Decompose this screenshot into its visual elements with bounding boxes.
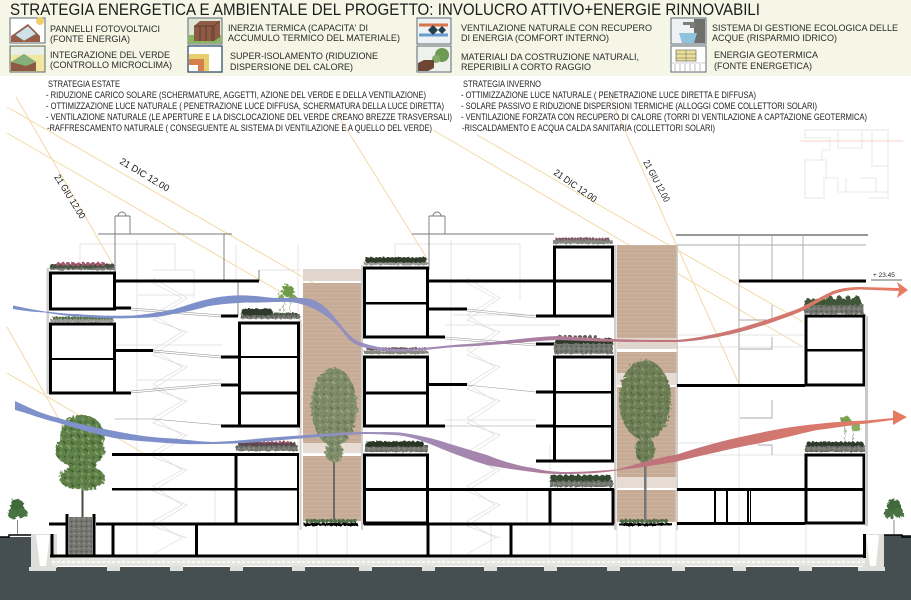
structure: roof lines and chimneys <box>98 212 868 455</box>
text block: strategia estate: - OTTIMIZZAZIONE LUCE NATURALE ( PENETRAZIONE LUCE DIFFUSA, SCHERMATURA DELLA LUCE DIRETTA) <box>46 100 444 111</box>
tree: right courtyard <box>619 360 671 522</box>
legend text: pannelli fotovoltaici <box>50 24 160 45</box>
green roofs <box>50 239 865 526</box>
section: right building structure <box>677 280 868 526</box>
icon: natural materials <box>417 46 451 72</box>
legend text: energia geotermica: (FONTE ENERGETICA) <box>714 61 812 72</box>
gray end walls <box>46 245 678 530</box>
text block: strategia inverno <box>461 78 867 133</box>
tree: small left <box>8 499 27 534</box>
icon: natural ventilation <box>417 18 451 44</box>
legend text: energia geotermica: ENERGIA GEOTERMICA <box>714 50 819 61</box>
text block: strategia estate: -RAFFRESCAMENTO NATURALE ( CONSEGUENTE AL SISTEMA DI VENTILAZIONE E A QUELLO DEL VERDE) <box>47 122 432 133</box>
legend text: inerzia termica <box>228 23 400 44</box>
stair towers <box>80 240 806 566</box>
key plan <box>800 130 903 198</box>
legend text: materiali naturali: REPERIBILI A CORTO RAGGIO <box>461 62 591 73</box>
courtyard planters <box>304 521 672 526</box>
roof garden 8 <box>554 337 613 354</box>
legend text: super isolamento: SUPER-ISOLAMENTO (RIDUZIONE <box>230 51 378 62</box>
small roof tree 1 <box>278 285 296 314</box>
planter with gravel <box>66 514 96 556</box>
section: left building structure <box>49 273 299 556</box>
text block: strategia estate: - RIDUZIONE CARICO SOLARE (SCHERMATURE, AGGETTI, AZIONE DEL VERDE E DELLA VENTILAZIONE) <box>46 89 426 100</box>
sun angle labels: 21 GIU 12.00 <box>640 158 672 204</box>
legend text: super isolamento <box>230 51 378 73</box>
legend text: ventilazione naturale: VENTILAZIONE NATURALE CON RECUPERO <box>461 23 652 34</box>
text block: strategia inverno: -RISCALDAMENTO E ACQUA CALDA SANITARIA (COLLETTORI SOLARI) <box>462 122 715 133</box>
legend text: gestione acque <box>712 23 898 44</box>
wind flow: lower ribbon <box>15 401 907 474</box>
legend text: super isolamento: DISPERSIONE DEL CALORE) <box>230 62 353 73</box>
text block: strategia estate: STRATEGIA ESTATE <box>48 78 120 89</box>
title: STRATEGIA ENERGETICA E AMBIENTALE DEL PROGETTO: INVOLUCRO ATTIVO+ENERGIE RINNOVABILI <box>10 1 760 19</box>
icon: super insulation <box>188 46 222 72</box>
section: central building structure <box>364 247 614 556</box>
sun angle labels: 21 GIU 12.00 <box>51 173 87 221</box>
roof garden 5 <box>364 260 428 265</box>
roof garden 9 <box>365 444 428 452</box>
text block: strategia inverno: - SOLARE PASSIVO E RIDUZIONE DISPERSIONI TERMICHE (ALLOGGI COME COLLETTORI SOLARI) <box>461 100 817 111</box>
roof garden 6 <box>364 349 428 354</box>
sun angle labels: 21 DIC 12.00 <box>117 156 171 194</box>
tree: small right <box>884 499 904 534</box>
roof garden 1 <box>50 264 115 270</box>
legend text: integrazione del verde: (CONTROLLO MICROCLIMA) <box>50 60 172 71</box>
legend text: materiali naturali: MATERIALI DA COSTRUZIONE NATURALI, <box>461 52 639 63</box>
roof garden 3 <box>241 312 300 319</box>
elevation mark <box>871 272 902 280</box>
panel: legend header <box>0 0 911 76</box>
wood facade panels <box>303 245 677 522</box>
legend text: gestione acque: SISTEMA DI GESTIONE ECOLOGICA DELLE <box>712 23 898 34</box>
text block: strategia estate <box>46 78 452 133</box>
legend text: ventilazione naturale: DI ENERGIA (COMFORT INTERNO) <box>461 33 609 44</box>
sun angle labels <box>51 156 672 221</box>
text block: strategia estate: - VENTILAZIONE NATURALE (LE APERTURE E LA DISCLOCAZIONE DEL VERDE CREANO BREZZE TRASVERSALI) <box>46 111 452 122</box>
legend text: inerzia termica: INERZIA TERMICA (CAPACITA' DI <box>228 23 368 34</box>
icon: green integration <box>10 46 45 72</box>
sun angle labels: 21 DIC 12.00 <box>551 167 599 205</box>
legend text: integrazione del verde: INTEGRAZIONE DEL VERDE <box>50 50 170 61</box>
icon: geothermal <box>671 46 706 72</box>
icon: water management <box>671 18 706 44</box>
wind flow: upper ribbon <box>13 282 908 352</box>
tree: left planter <box>55 415 105 518</box>
legend text: energia geotermica <box>714 50 819 72</box>
roof garden 12 <box>805 444 865 452</box>
legend text: inerzia termica: ACCUMULO TERMICO DEL MATERIALE) <box>228 33 400 44</box>
tree: centre courtyard <box>311 368 357 522</box>
legend text: materiali naturali <box>461 52 639 73</box>
roof garden 10 <box>550 478 613 487</box>
icon: solar panels <box>10 17 45 43</box>
roof garden 4 <box>236 442 298 451</box>
roof garden 7 <box>553 239 613 244</box>
legend text: pannelli fotovoltaici: (FONTE ENERGIA) <box>50 34 130 45</box>
small roof tree 2 <box>841 416 860 441</box>
sun rays <box>7 93 803 460</box>
text block: strategia inverno: STRATEGIA INVERNO <box>463 78 541 89</box>
legend text: gestione acque: ACQUE (RISPARMIO IDRICO) <box>712 33 837 44</box>
roof garden 2 <box>50 318 114 322</box>
legend text: integrazione del verde <box>50 50 172 71</box>
elevation mark: + 23.45 <box>873 272 895 279</box>
legend text: pannelli fotovoltaici: PANNELLI FOTOVOLTAICI <box>50 24 160 35</box>
roof garden 11 <box>804 298 864 314</box>
foundation slab and ground <box>0 534 911 600</box>
text block: strategia inverno: - OTTIMIZZAZIONE LUCE NATURALE ( PENETRAZIONE LUCE DIRETTA E DIFFUSA) <box>461 89 756 100</box>
icon: thermal inertia <box>188 18 222 44</box>
legend text: ventilazione naturale <box>461 23 652 44</box>
